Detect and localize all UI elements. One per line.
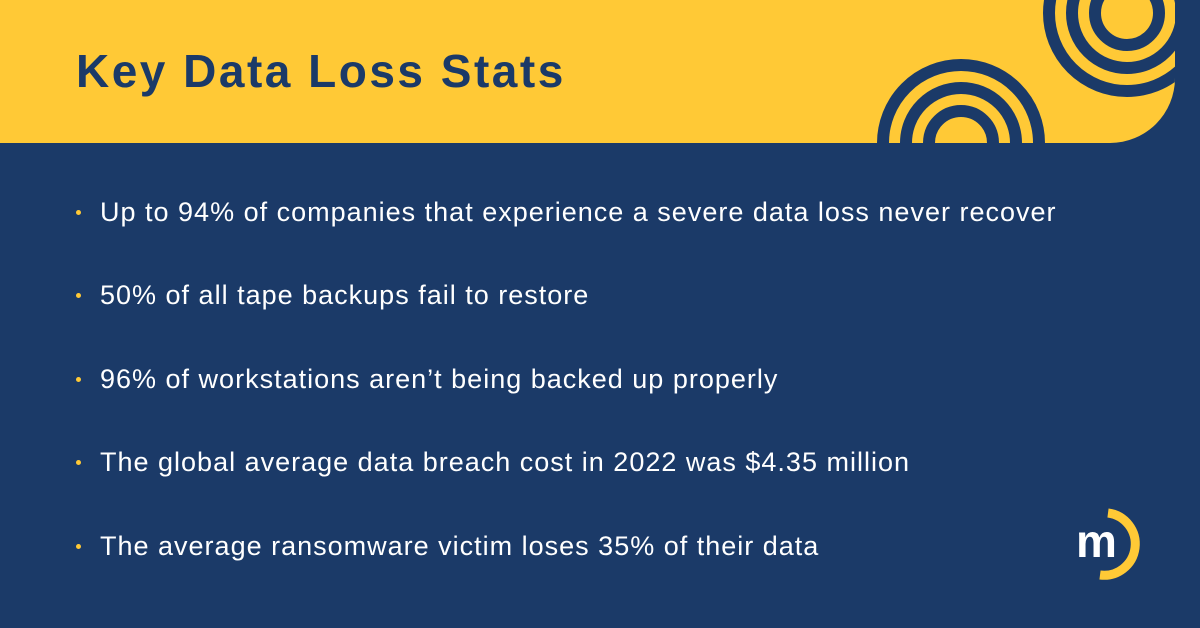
logo: m (1076, 515, 1115, 567)
stat 2: 50% of all tape backups fail to restore (100, 280, 589, 310)
stat 5: The average ransomware victim loses 35% of their data (100, 531, 819, 561)
logo (1076, 508, 1140, 580)
stat 1: Up to 94% of companies that experience a severe data loss never recover (100, 197, 1056, 227)
stat 3: 96% of workstations aren’t being backed up properly (100, 364, 778, 394)
header band with decorative circles (0, 0, 1175, 143)
title: Key Data Loss Stats (76, 45, 566, 97)
stat 4: The global average data breach cost in 2022 was $4.35 million (100, 447, 910, 477)
